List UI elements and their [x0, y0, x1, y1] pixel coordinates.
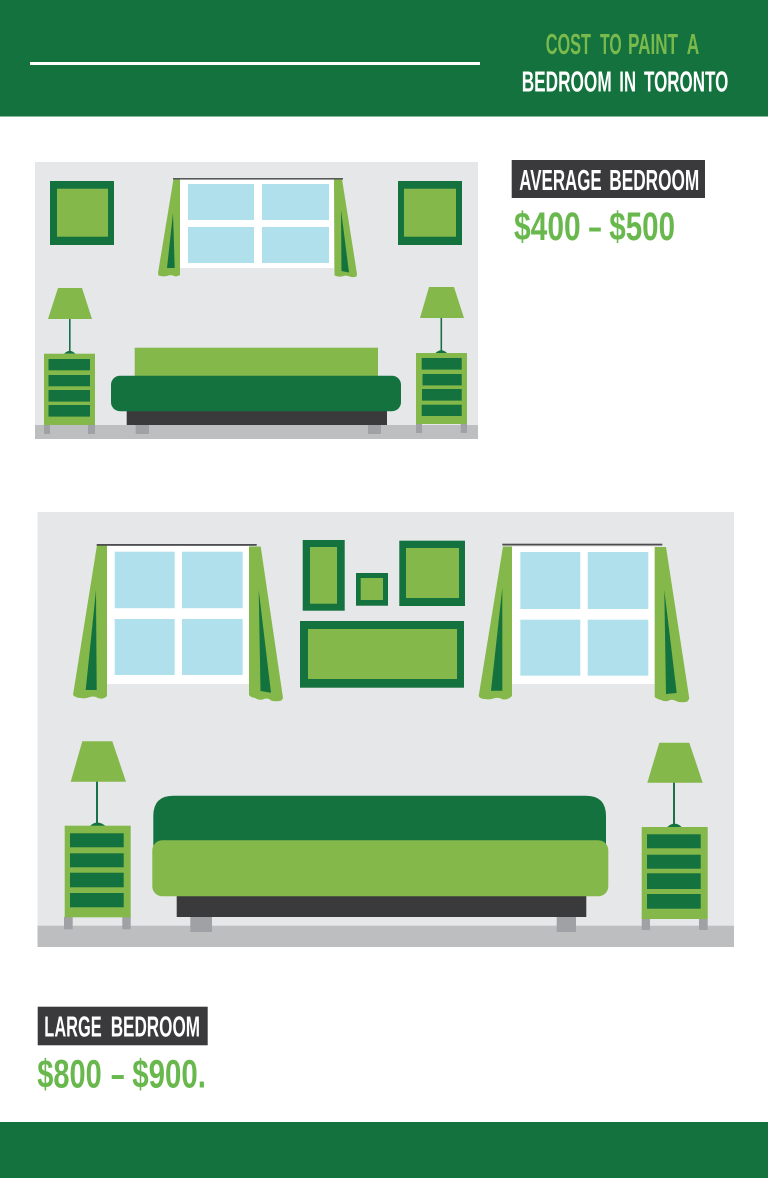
large bed	[152, 796, 608, 932]
right window curtain right	[655, 547, 689, 702]
picture frame right	[398, 181, 462, 245]
right window curtain left	[479, 546, 512, 700]
large nightstand left	[64, 826, 131, 929]
lamp right	[420, 287, 464, 353]
title line 1: TO	[600, 29, 622, 61]
title line 1: A	[687, 29, 699, 61]
title line 2: BEDROOM	[522, 66, 612, 98]
left window curtain right	[249, 546, 283, 701]
footer banner	[0, 1122, 768, 1178]
price: average bedroom: $400	[514, 205, 581, 249]
frame square	[399, 541, 465, 606]
price: average bedroom: $500	[609, 205, 675, 249]
bed	[111, 348, 401, 434]
label: average bedroom: BEDROOM	[609, 165, 699, 197]
panel: average bedroom illustration	[35, 162, 478, 439]
curtain right	[334, 179, 357, 277]
price: average bedroom: –	[588, 205, 602, 249]
nightstand right	[416, 353, 467, 433]
left window rod	[97, 544, 257, 546]
curtain rod	[173, 178, 343, 180]
large lamp left	[71, 741, 126, 826]
price: large bedroom: $900.	[132, 1052, 206, 1096]
price: large bedroom: –	[111, 1052, 124, 1096]
title line 2: IN	[619, 66, 636, 98]
label: large bedroom	[38, 1007, 208, 1045]
price: large bedroom: $800	[37, 1052, 102, 1096]
header banner	[0, 0, 768, 116]
picture frame left	[50, 181, 114, 245]
label: average bedroom	[512, 160, 705, 198]
price: large bedroom	[37, 1052, 206, 1096]
panel: large bedroom illustration	[38, 512, 734, 947]
left window	[107, 546, 249, 684]
title line 1	[546, 29, 699, 61]
right window	[512, 547, 655, 684]
title line 1: COST	[546, 29, 591, 61]
nightstand left	[44, 354, 95, 434]
curtain left	[158, 179, 180, 276]
left window curtain left	[73, 545, 107, 699]
window	[180, 179, 334, 268]
lamp left	[48, 288, 92, 354]
large nightstand right	[642, 827, 708, 930]
frame wide	[300, 621, 464, 688]
title line 1: PAINT	[628, 29, 678, 61]
label: large bedroom: BEDROOM	[111, 1012, 200, 1044]
label: large bedroom: LARGE	[44, 1012, 102, 1044]
right window rod	[502, 544, 662, 546]
large lamp right	[647, 743, 703, 827]
frame tall	[303, 540, 345, 611]
label: average bedroom: AVERAGE	[519, 165, 602, 197]
price: average bedroom	[514, 205, 675, 249]
frame small	[356, 573, 388, 606]
